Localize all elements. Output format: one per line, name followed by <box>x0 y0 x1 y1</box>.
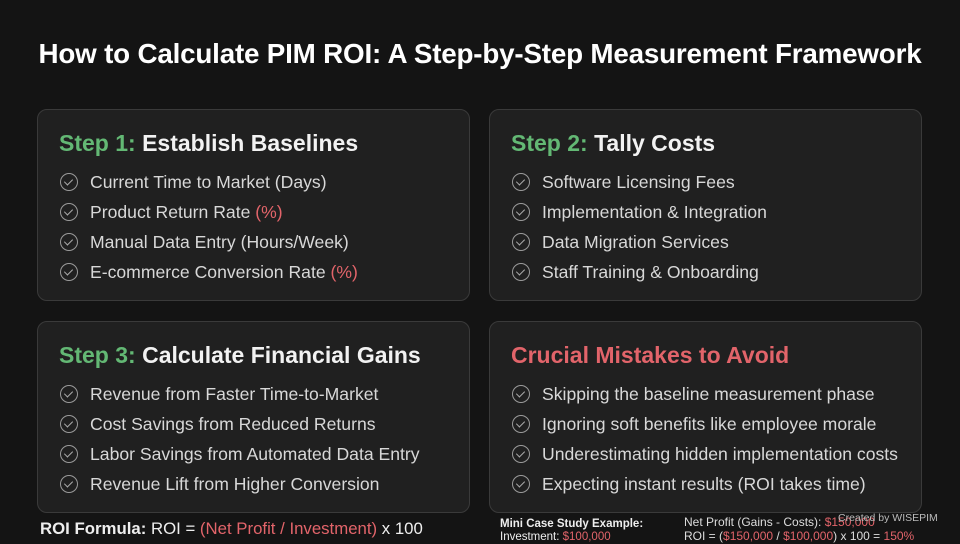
list: baselines: (%) <box>331 262 358 282</box>
list: baselines: Current Time to Market (Days) <box>90 172 327 192</box>
list: baselines: Manual Data Entry (Hours/Week) <box>90 232 349 252</box>
panel: step 1 <box>37 109 470 301</box>
panel: step 2 <box>489 109 922 301</box>
case study: Mini Case Study Example: <box>500 518 643 530</box>
list: costs <box>512 172 767 282</box>
list: costs: Implementation & Integration <box>542 202 767 222</box>
panel: step 3 <box>37 321 470 513</box>
list: mistakes: Expecting instant results (ROI takes time) <box>542 474 866 494</box>
list: mistakes: Underestimating hidden implementation costs <box>542 444 898 464</box>
credit: Created by WISEPIM <box>838 512 938 524</box>
list: costs: Staff Training & Onboarding <box>542 262 759 282</box>
list: baselines: (%) <box>255 202 283 222</box>
case study: Investment: $100,000 <box>500 531 611 543</box>
case study <box>500 518 643 543</box>
list: gains: Cost Savings from Reduced Returns <box>90 414 376 434</box>
heading: mistakes: Crucial Mistakes to Avoid <box>511 342 789 368</box>
panel: mistakes <box>489 321 922 513</box>
list: gains: Revenue Lift from Higher Conversion <box>90 474 379 494</box>
list: baselines <box>60 172 358 282</box>
heading: step 3: Step 3: Calculate Financial Gains <box>59 342 421 368</box>
formula: ROI Formula: ROI = (Net Profit / Investment) x 100 <box>40 519 423 538</box>
list: mistakes <box>512 384 898 494</box>
list: mistakes: Skipping the baseline measurement phase <box>542 384 875 404</box>
list: gains: Revenue from Faster Time-to-Market <box>90 384 378 404</box>
list: costs: Software Licensing Fees <box>542 172 735 192</box>
heading: step 2: Step 2: Tally Costs <box>511 130 715 156</box>
list: mistakes: Ignoring soft benefits like employee morale <box>542 414 876 434</box>
list: baselines: E-commerce Conversion Rate <box>90 262 326 282</box>
list: gains: Labor Savings from Automated Data Entry <box>90 444 420 464</box>
heading: step 1: Step 1: Establish Baselines <box>59 130 358 156</box>
title: How to Calculate PIM ROI: A Step-by-Step Measurement Framework <box>39 38 921 69</box>
case study results <box>684 515 914 543</box>
list: gains <box>60 384 420 494</box>
list: baselines: Product Return Rate <box>90 202 250 222</box>
case study results: Net Profit (Gains - Costs): $150,000 <box>684 515 875 529</box>
case study results: ROI = ($150,000 / $100,000) x 100 = 150% <box>684 529 914 543</box>
list: costs: Data Migration Services <box>542 232 729 252</box>
